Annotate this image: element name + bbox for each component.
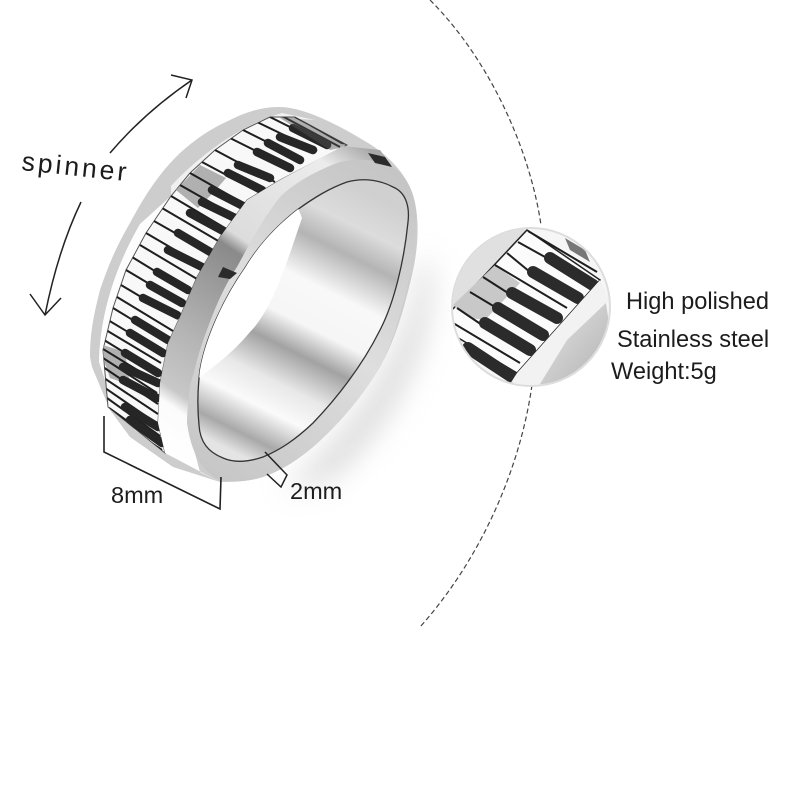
ring: [90, 107, 418, 482]
front bevel: [158, 146, 392, 482]
band top shade: [280, 117, 346, 150]
ring interior: [198, 180, 408, 461]
magnified white keys: [445, 230, 600, 373]
left bevel highlight: [99, 196, 171, 456]
magnified dark corner: [565, 238, 590, 262]
interior white wedge: [196, 208, 302, 380]
dimension bracket: 2mm: [265, 452, 287, 487]
magnified black keys: [468, 258, 593, 377]
upper left bevel: [453, 230, 526, 308]
ring silhouette: [90, 107, 418, 482]
dashed arc lower: [420, 385, 532, 627]
detail magnifier circle: [451, 227, 611, 387]
spec text: Stainless steel: Stainless steel: [617, 327, 769, 353]
front face: [187, 160, 416, 481]
dashed arc upper: [430, 0, 541, 225]
label: 8mm: 8mm: [111, 482, 163, 508]
upper bevel highlight: [171, 113, 315, 196]
piano band: [102, 112, 360, 453]
spec text: High polished: High polished: [626, 289, 769, 315]
label: spinner: spinner: [20, 146, 131, 187]
magnified gray wedge: [540, 303, 608, 384]
magnified silver keys: [453, 265, 520, 320]
spec text: Weight: Weight:5g: [611, 359, 717, 385]
silver key tint: [102, 165, 226, 385]
arrow: spin up: [110, 75, 192, 153]
ring shadow: [280, 260, 432, 490]
circle base: [452, 228, 610, 386]
magnified key lines: [453, 231, 597, 363]
dimension bracket: 8mm: [104, 416, 221, 509]
black keys: [123, 123, 343, 443]
magnified bevel: [511, 280, 600, 383]
arrow: spin down: [30, 202, 81, 315]
bevel dark spots: [218, 153, 392, 279]
label: 2mm: 2mm: [290, 478, 342, 504]
white keys base: [103, 117, 347, 453]
key lines: [103, 116, 360, 450]
infographic canvas: [22, 0, 768, 626]
